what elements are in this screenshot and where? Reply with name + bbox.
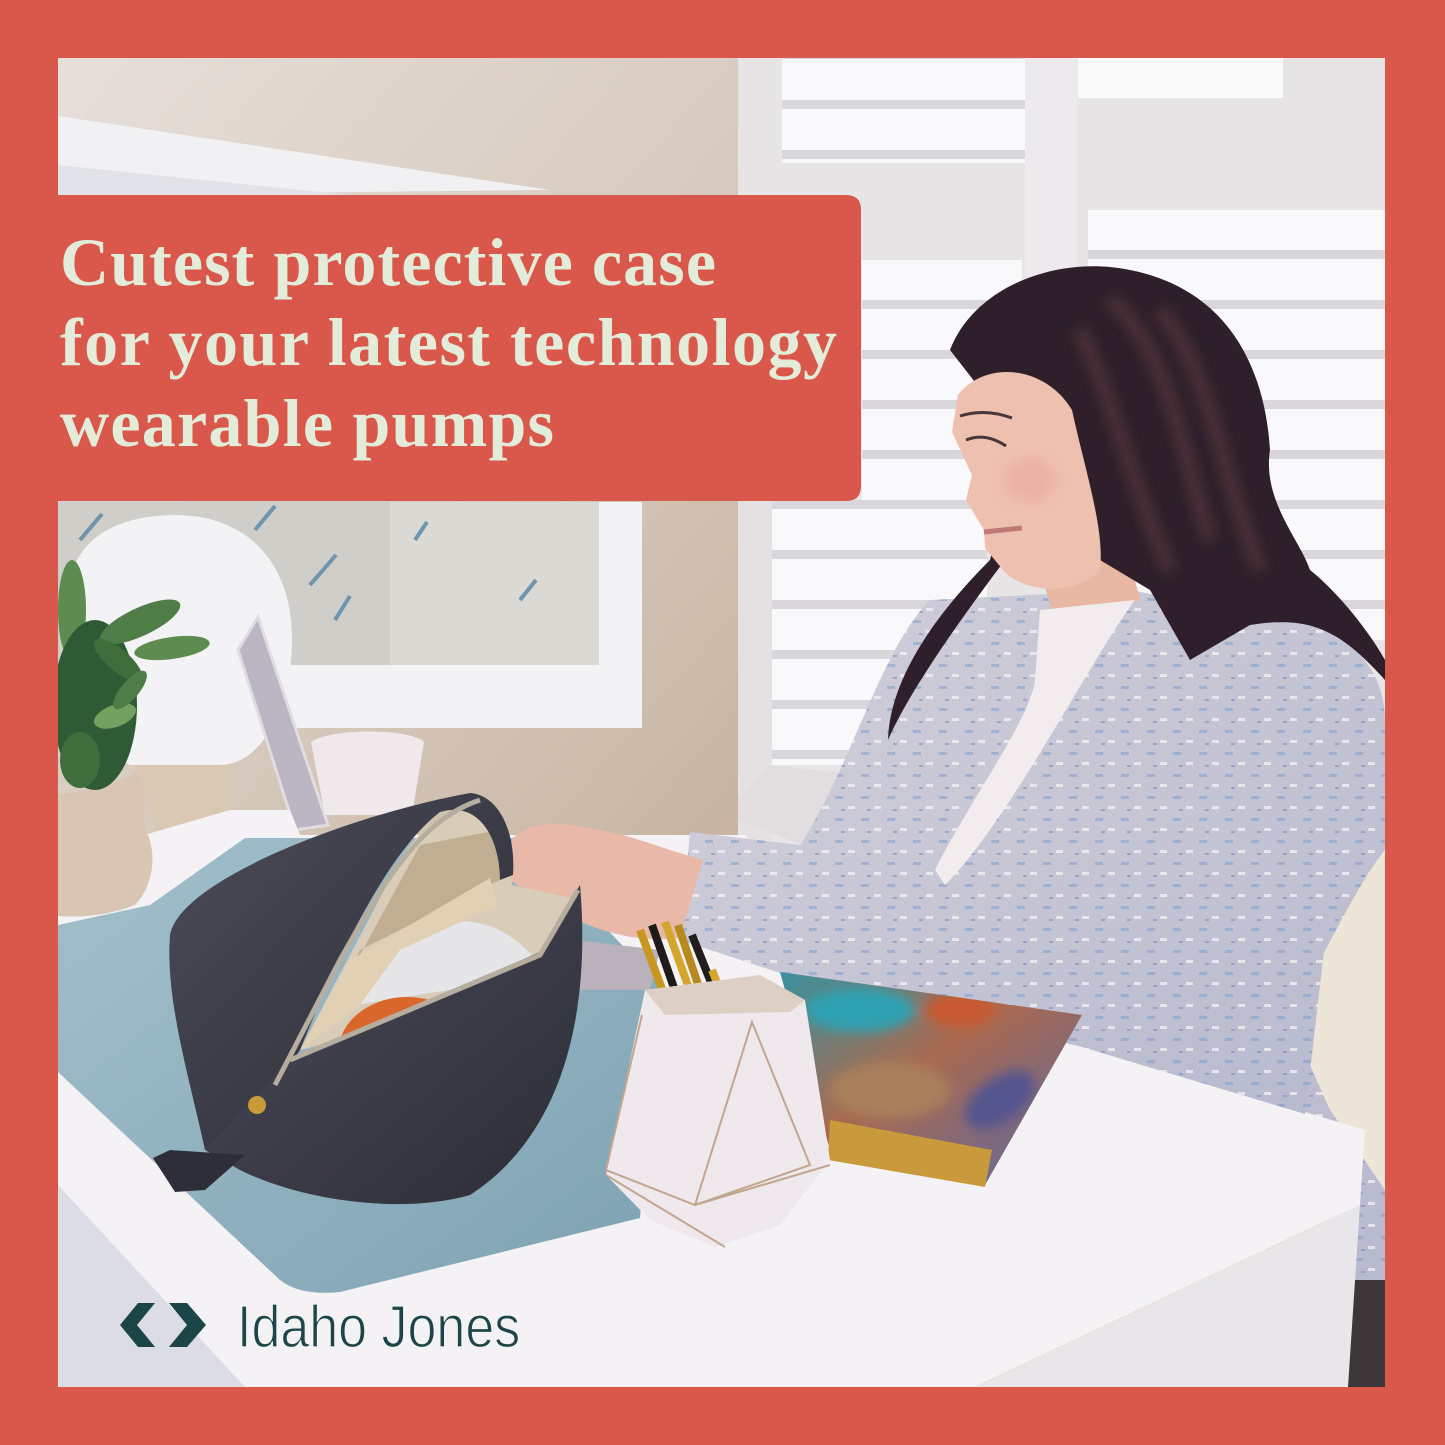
zipper	[275, 800, 578, 1085]
neck	[1045, 560, 1140, 609]
woman sleeve and hand	[508, 600, 1330, 1114]
shelf top	[58, 116, 550, 195]
tan flap	[300, 878, 497, 1050]
dark floor corner	[1348, 1280, 1385, 1387]
face	[952, 372, 1101, 589]
laptop screen	[238, 617, 328, 830]
notebook	[780, 972, 1082, 1187]
bag base	[205, 885, 582, 1204]
eyebrow	[960, 412, 1012, 418]
inner dark shadow	[357, 832, 500, 956]
bag lid	[169, 793, 513, 1150]
woman head and hair	[888, 266, 1385, 740]
desk front face	[58, 1185, 245, 1387]
blouse	[935, 600, 1135, 885]
hands	[508, 824, 703, 939]
hair highlights	[1080, 300, 1260, 570]
lamp	[76, 515, 292, 831]
wall	[58, 58, 758, 858]
pens	[640, 922, 728, 1010]
plant	[53, 560, 211, 790]
sheepskin chair	[1310, 850, 1385, 1190]
title line 3: wearable pumps	[60, 385, 554, 461]
title line 1: Cutest protective case	[60, 224, 716, 300]
title banner	[58, 195, 861, 501]
woman torso	[800, 540, 1385, 1310]
eye	[966, 437, 1006, 446]
keyboard base	[575, 940, 660, 990]
bag strap	[153, 1150, 245, 1192]
cheek	[1006, 460, 1054, 500]
window shutters	[738, 58, 1385, 848]
geometric pen holder	[606, 975, 830, 1247]
blue desk mat	[58, 838, 660, 1293]
hair	[888, 266, 1385, 740]
brand name: Idaho Jones	[237, 1293, 520, 1360]
pump bag	[153, 793, 582, 1204]
title line 2: for your latest technology	[60, 304, 837, 380]
gold zipper pull	[248, 1096, 266, 1114]
brand logo	[120, 1293, 520, 1360]
pump flange	[355, 921, 532, 1005]
bag inner lining	[300, 808, 580, 1050]
mouth	[984, 528, 1022, 532]
white cup	[311, 732, 424, 815]
desk white surface	[58, 810, 1365, 1387]
framed art	[58, 502, 642, 728]
icon: chevrons	[120, 1303, 206, 1347]
plant pot	[58, 770, 152, 917]
orange pump part	[342, 997, 428, 1036]
